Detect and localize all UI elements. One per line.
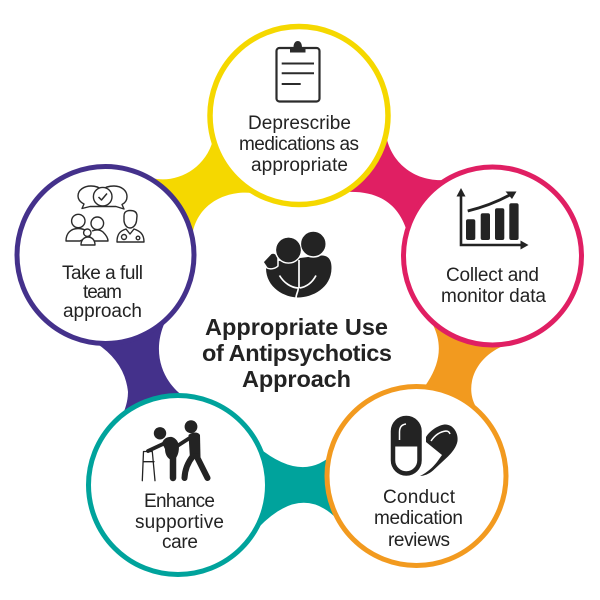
- icon: capsule and pill: [393, 418, 458, 476]
- label: collect and monitor data: [441, 265, 546, 307]
- label: deprescribe medications as appropriate: medications as: [239, 134, 359, 155]
- panel: collect and monitor data: [404, 167, 582, 345]
- ring: pink: [404, 167, 582, 345]
- label: enhance supportive care: care: [162, 532, 198, 553]
- label: enhance supportive care: [135, 491, 224, 553]
- label: take a full team approach: Take a full: [62, 263, 143, 284]
- label: take a full team approach: team: [83, 282, 122, 303]
- label: enhance supportive care: Enhance: [144, 491, 215, 512]
- icon: team: [66, 186, 144, 245]
- ring: orange: [327, 386, 506, 566]
- panel: enhance supportive care: [88, 396, 268, 574]
- label: take a full team approach: [62, 263, 143, 322]
- connector: orange: [425, 320, 503, 405]
- heading: [202, 314, 392, 392]
- label: conduct medication reviews: Conduct: [383, 487, 456, 508]
- label: deprescribe medications as appropriate: appropriate: [251, 155, 348, 176]
- label: collect and monitor data: monitor data: [441, 286, 546, 307]
- label: conduct medication reviews: [374, 487, 463, 551]
- icon: family embrace: [263, 231, 332, 298]
- ring: teal: [88, 396, 268, 574]
- label: collect and monitor data: Collect and: [446, 265, 539, 286]
- label: take a full team approach: approach: [63, 301, 142, 322]
- label: conduct medication reviews: reviews: [388, 530, 450, 551]
- panel: conduct medication reviews: [327, 386, 506, 566]
- label: enhance supportive care: supportive: [135, 512, 224, 533]
- ring: yellow: [210, 26, 388, 204]
- connector: pink: [340, 135, 445, 235]
- label: conduct medication reviews: medication: [374, 508, 463, 529]
- icon: rising bar chart: [456, 188, 528, 250]
- panel: deprescribe medications: [210, 26, 388, 204]
- connector: yellow: [152, 140, 260, 238]
- central hub: [202, 231, 392, 392]
- ring: purple: [17, 166, 194, 344]
- heading: Appropriate Use: [205, 314, 388, 340]
- panel: take a full team approach: [17, 166, 194, 344]
- icon: clipboard: [276, 41, 320, 102]
- heading: Approach: [242, 366, 351, 392]
- icon: carer supporting person with walker: [142, 420, 208, 481]
- label: deprescribe medications as appropriate: Deprescribe: [248, 113, 351, 134]
- connector: purple: [96, 320, 186, 420]
- label: deprescribe medications as appropriate: [239, 113, 359, 176]
- heading: of Antipsychotics: [202, 340, 392, 366]
- connector: teal: [258, 447, 338, 528]
